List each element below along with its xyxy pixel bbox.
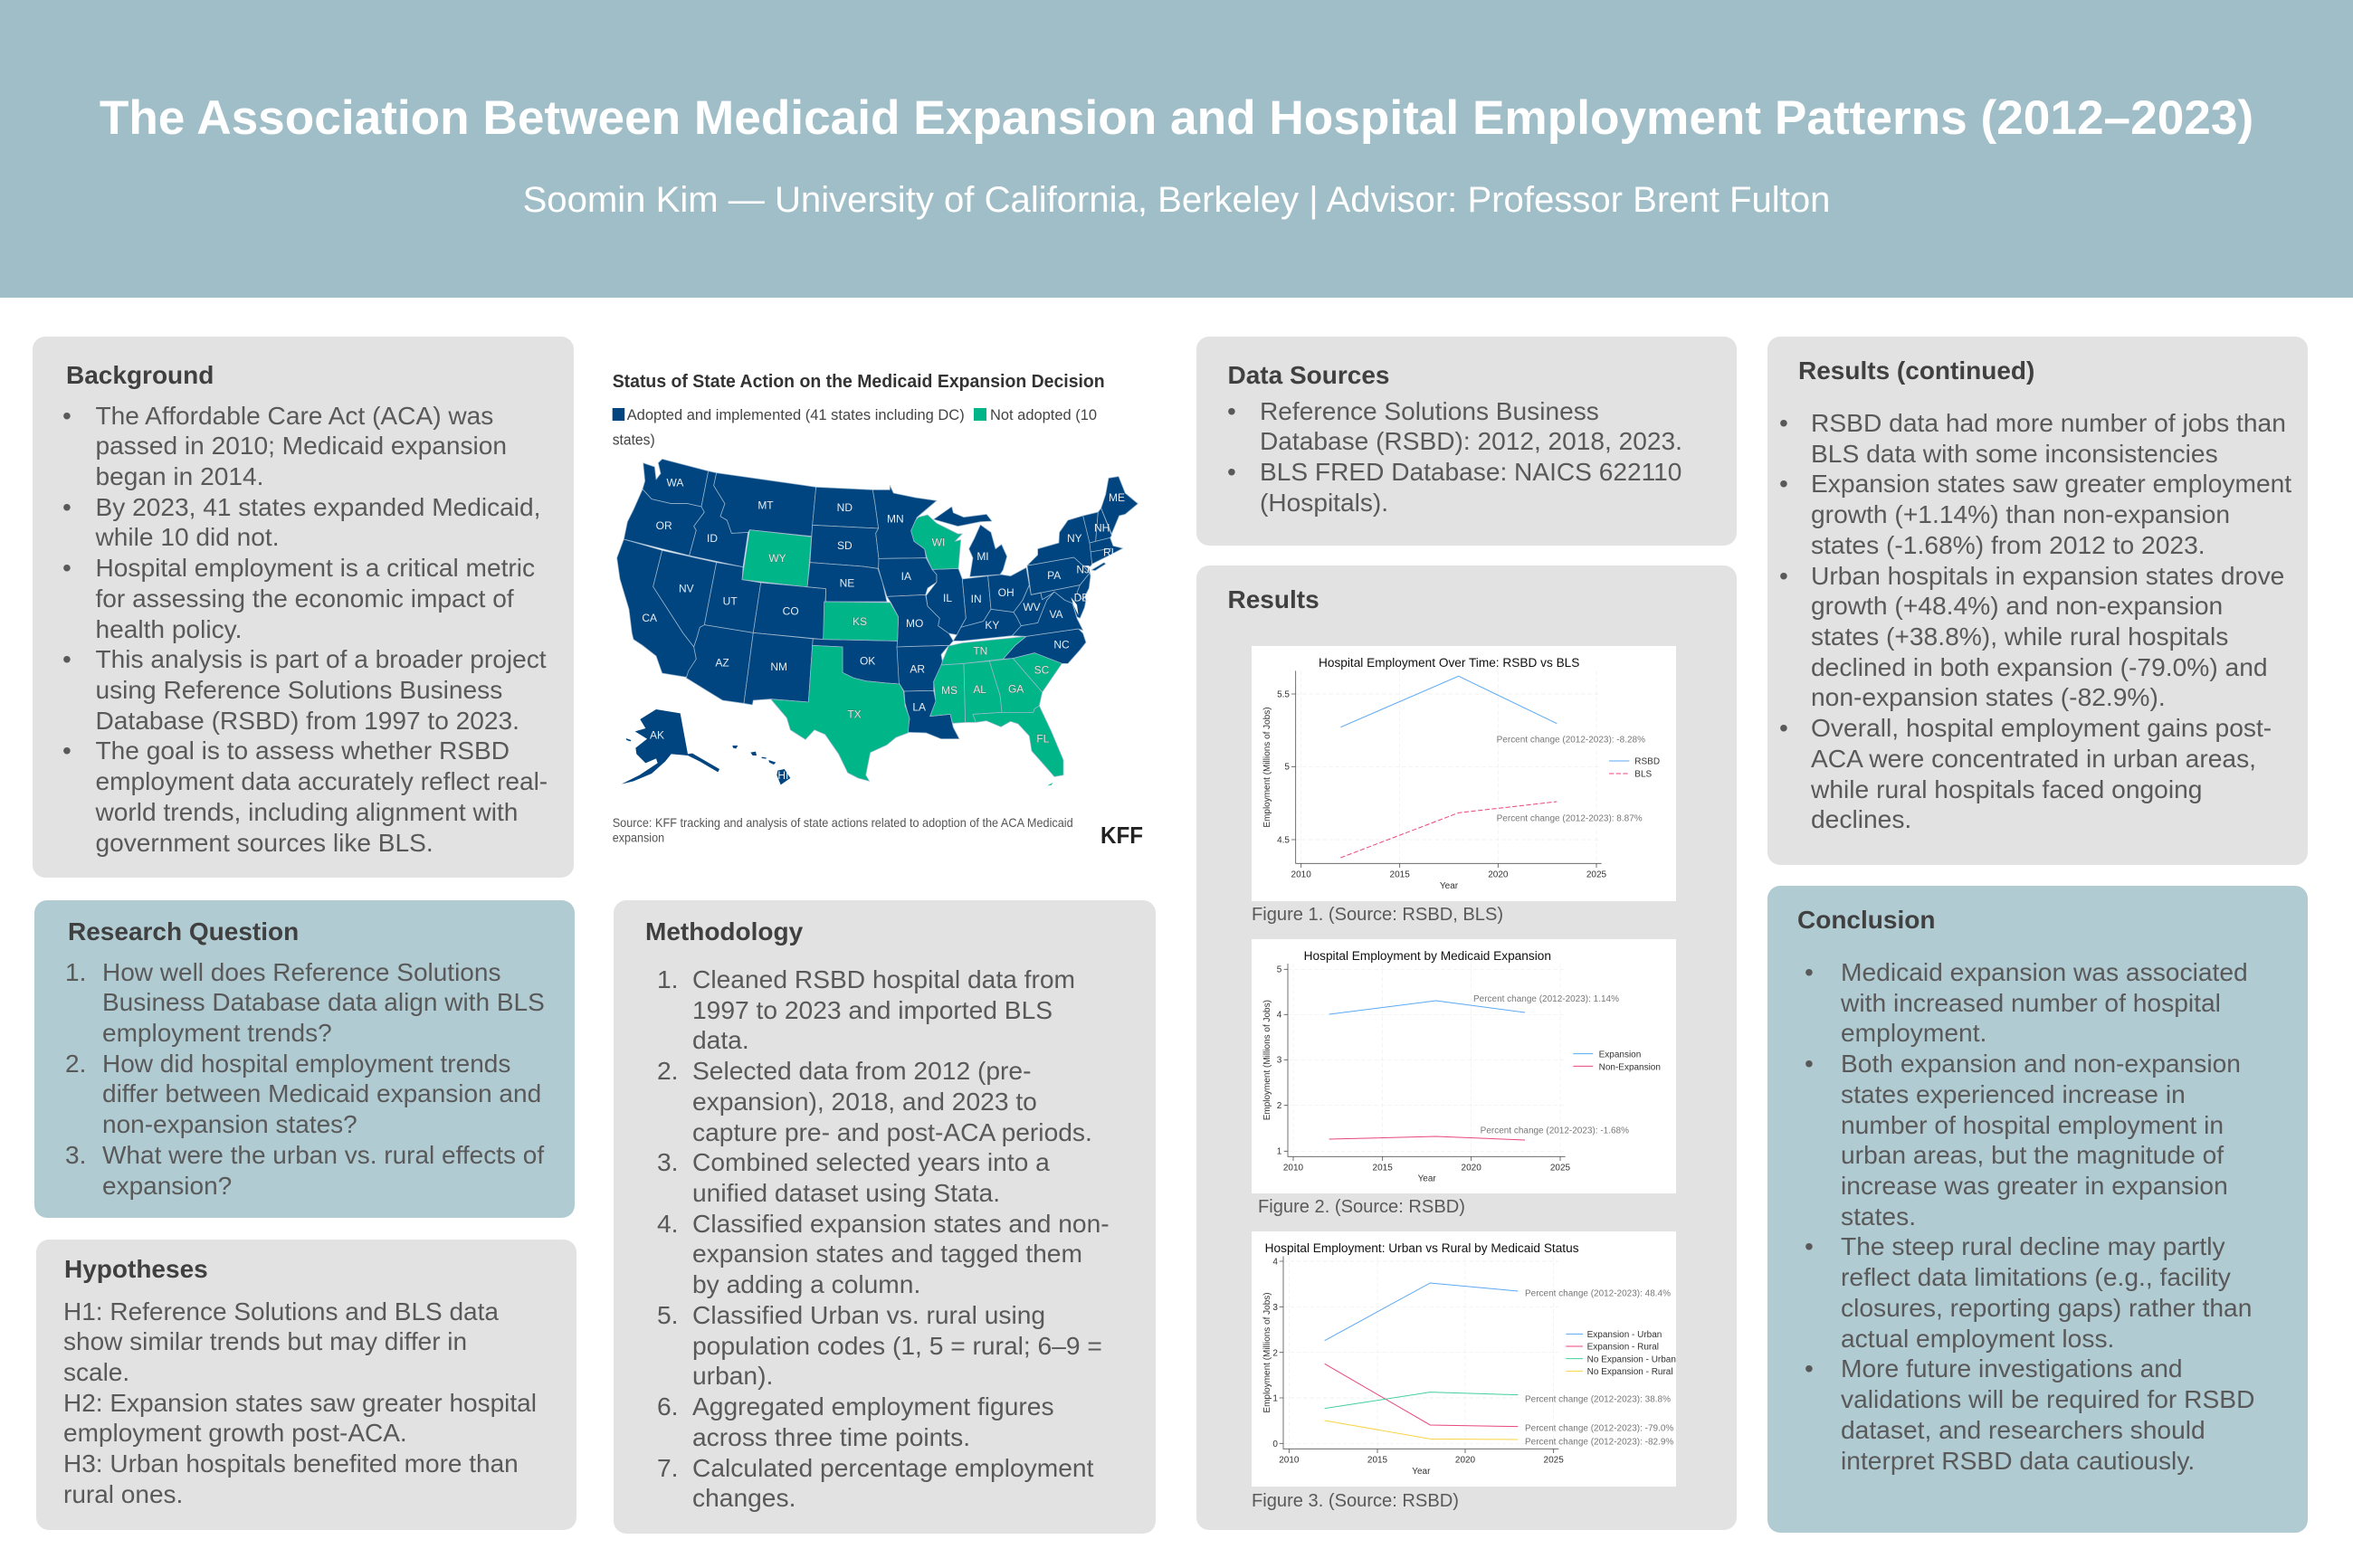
annotations [1473, 994, 1629, 1136]
map source note: expansion [613, 831, 664, 845]
state labels: OK [860, 654, 875, 667]
text: hypotheses list: show similar trends but may differ in [63, 1327, 467, 1355]
text: data sources bullets: Reference Solutions Business [1260, 396, 1599, 425]
text: background bullets: passed in 2010; Medicaid expansion [96, 432, 507, 460]
text: results continued bullets: declined in both expansion (-79.0%) and [1811, 652, 2268, 681]
text: methodology steps: capture pre- and post-ACA periods. [692, 1117, 1092, 1146]
text: background bullets: Database (RSBD) from 1997 to 2023. [96, 707, 519, 735]
state labels: NY [1067, 532, 1082, 545]
text: methodology steps: across three time points. [692, 1422, 970, 1451]
axis labels: 2015 [1390, 870, 1410, 880]
state labels: NC [1053, 638, 1070, 651]
state labels: IA [901, 570, 911, 583]
line: no expansion urban [1325, 1392, 1518, 1409]
line: expansion [1329, 1001, 1525, 1014]
map legend: Adopted and implemented (41 states including DC) [627, 406, 965, 423]
text: methodology steps: Combined selected years into a [692, 1147, 1050, 1176]
axis labels [1262, 690, 1607, 891]
axis labels: Employment (Millions of Jobs) [1262, 1292, 1272, 1413]
text: conclusion bullets: More future investigations and [1841, 1354, 2183, 1383]
state labels: KS [853, 615, 867, 628]
text: hypotheses list: H3: Urban hospitals benefited more than [63, 1449, 519, 1478]
text: conclusion bullets: states. [1841, 1202, 1916, 1231]
legend: Expansion - Urban [1587, 1330, 1662, 1340]
text: data sources bullets: • [1227, 458, 1236, 486]
axis labels: 2015 [1367, 1455, 1388, 1465]
map source note [613, 815, 1073, 845]
text: data sources bullets: • [1227, 396, 1236, 425]
title: The Association Between Medicaid Expansion and Hospital Employment Patterns (2012–2023) [100, 90, 2253, 145]
state labels: CO [783, 604, 799, 617]
state labels: MT [757, 499, 774, 512]
annotations: Percent change (2012-2023): -1.68% [1481, 1126, 1629, 1136]
text: methodology steps [657, 965, 1110, 1512]
text: results continued bullets: growth (+48.4%) and non-expansion [1811, 591, 2223, 620]
chart title: Hospital Employment by Medicaid Expansion [1304, 949, 1551, 963]
state labels: KY [985, 619, 999, 632]
heading: background: Background [66, 361, 214, 389]
state labels: SD [837, 539, 853, 552]
annotations [1525, 1288, 1673, 1447]
annotations: Percent change (2012-2023): 38.8% [1525, 1394, 1671, 1404]
axis labels: 0 [1272, 1440, 1278, 1449]
text: results continued bullets: states (-1.68%) from 2012 to 2023. [1811, 530, 2205, 559]
text: results continued bullets: while rural hospitals faced ongoing [1811, 774, 2202, 803]
map legend: Not adopted (10 [990, 406, 1097, 423]
text: data sources bullets [1227, 396, 1682, 517]
state labels: ME [1109, 491, 1125, 504]
text: background bullets: using Reference Solutions Business [96, 676, 502, 704]
text: research questions list [65, 957, 545, 1200]
axes [1284, 964, 1566, 1161]
text: background bullets: • [62, 402, 71, 429]
text: background bullets: employment data accurately reflect real- [96, 767, 548, 795]
text: methodology steps: 2. [657, 1056, 679, 1085]
chart: figure 1 [1252, 646, 1676, 901]
state labels: WY [768, 552, 786, 565]
text: conclusion bullets: increase was greater in expansion [1841, 1171, 2228, 1200]
state labels: IL [943, 592, 952, 604]
caption: figure 1: Figure 1. (Source: RSBD, BLS) [1252, 905, 1503, 925]
text: conclusion bullets: closures, reporting gaps) rather than [1841, 1293, 2252, 1322]
panel: methodology [614, 900, 1156, 1534]
text: conclusion bullets: interpret RSBD data cautiously. [1841, 1446, 2195, 1475]
annotations [1497, 736, 1645, 824]
map: US states [617, 459, 1138, 785]
text: conclusion bullets: validations will be required for RSBD [1841, 1384, 2254, 1413]
axis labels: 4 [1277, 1011, 1282, 1021]
legend [1566, 1330, 1676, 1377]
state labels: ID [707, 532, 718, 545]
state labels: VA [1049, 608, 1063, 621]
panel: results [1196, 565, 1737, 1530]
text: methodology steps: changes. [692, 1483, 795, 1512]
state labels: AR [910, 662, 925, 675]
text: results continued bullets: RSBD data had more number of jobs than [1811, 408, 2286, 437]
axis labels: Year [1412, 1467, 1431, 1477]
annotations: Percent change (2012-2023): -8.28% [1497, 736, 1645, 746]
heading: research question: Research Question [68, 917, 299, 946]
text: background bullets: • [62, 493, 71, 521]
axes [1280, 1256, 1558, 1453]
state labels: TN [973, 645, 987, 658]
state labels: HI [777, 769, 788, 782]
text: background bullets: • [62, 645, 71, 673]
non-expansion states [742, 515, 1063, 785]
line: no expansion rural [1325, 1421, 1518, 1440]
state labels: AK [650, 728, 664, 741]
map title: Status of State Action on the Medicaid Expansion Decision [613, 372, 1105, 392]
text: background bullets: began in 2014. [96, 462, 263, 490]
state labels: MI [976, 550, 989, 563]
text: research questions list: Business Database data align with BLS [102, 988, 545, 1016]
text: conclusion bullets: dataset, and researchers should [1841, 1415, 2205, 1444]
text: methodology steps: Calculated percentage employment [692, 1453, 1093, 1482]
text: research questions list: expansion? [102, 1172, 232, 1200]
state labels: TX [847, 708, 862, 721]
text: background bullets: world trends, including alignment with [96, 798, 518, 826]
axis labels: 2020 [1455, 1455, 1476, 1465]
text: results continued bullets: declines. [1811, 804, 1911, 833]
figure: medicaid expansion status map [612, 372, 1143, 849]
annotations: Percent change (2012-2023): 8.87% [1497, 814, 1643, 824]
text: conclusion bullets: employment. [1841, 1018, 1986, 1047]
text: research questions list: non-expansion states? [102, 1110, 357, 1138]
text: results continued bullets: states (+38.8%), while rural hospitals [1811, 622, 2228, 651]
axis labels: Year [1440, 881, 1459, 891]
line: expansion urban [1325, 1283, 1518, 1341]
text: results continued bullets: • [1779, 469, 1788, 498]
panel: research question [34, 900, 575, 1218]
text: methodology steps: 3. [657, 1147, 679, 1176]
text: methodology steps: Classified Urban vs. rural using [692, 1300, 1045, 1329]
state labels: MO [906, 617, 923, 630]
text: methodology steps: expansion states and tagged them [692, 1239, 1082, 1268]
text: methodology steps: Selected data from 2012 (pre- [692, 1056, 1031, 1085]
legend: RSBD [1634, 757, 1660, 767]
text: methodology steps: data. [692, 1025, 749, 1054]
text: hypotheses list [63, 1297, 537, 1508]
text: conclusion bullets: reflect data limitations (e.g., facility [1841, 1262, 2231, 1291]
text: methodology steps: by adding a column. [692, 1269, 920, 1298]
legend [1573, 1050, 1661, 1072]
chart: figure 3 [1252, 1231, 1676, 1487]
axis labels: 5 [1277, 965, 1282, 975]
text: methodology steps: 1. [657, 965, 679, 993]
caption: figure 3: Figure 3. (Source: RSBD) [1252, 1491, 1459, 1511]
axis labels: Year [1418, 1174, 1436, 1184]
text: research questions list: What were the urban vs. rural effects of [102, 1141, 544, 1169]
state labels: CA [642, 612, 657, 624]
axis labels: 2025 [1550, 1163, 1571, 1173]
text: methodology steps: expansion), 2018, and 2023 to [692, 1087, 1037, 1116]
text: data sources bullets: Database (RSBD): 2012, 2018, 2023. [1260, 427, 1682, 455]
text: results continued bullets [1779, 408, 2291, 833]
legend: Non-Expansion [1599, 1062, 1661, 1072]
state labels: GA [1008, 682, 1024, 695]
text: methodology steps: 5. [657, 1300, 679, 1329]
text: background bullets: • [62, 554, 71, 582]
text: methodology steps: Cleaned RSBD hospital data from [692, 965, 1075, 993]
text: conclusion bullets: number of hospital employment in [1841, 1110, 2224, 1139]
text: results continued bullets: growth (+1.14%) than non-expansion [1811, 499, 2230, 528]
legend: Expansion [1599, 1050, 1641, 1060]
text: results continued bullets: non-expansion states (-82.9%). [1811, 682, 2166, 711]
line: non-expansion [1329, 1136, 1525, 1140]
state labels: NH [1094, 522, 1110, 535]
text: conclusion bullets: • [1805, 1354, 1814, 1383]
text: research questions list: 3. [65, 1141, 86, 1169]
text: research questions list: How did hospital employment trends [102, 1050, 510, 1078]
axis labels: 3 [1277, 1056, 1282, 1066]
text: results continued bullets: Overall, hospital employment gains post- [1811, 713, 2272, 742]
text: hypotheses list: employment growth post-ACA. [63, 1419, 407, 1447]
state labels: AL [973, 683, 986, 696]
axis labels: 3 [1272, 1303, 1278, 1313]
panel: data sources [1196, 337, 1737, 546]
text: hypotheses list: rural ones. [63, 1480, 183, 1508]
state labels: WI [932, 537, 945, 549]
state labels: NM [770, 660, 787, 673]
caption: figure 2: Figure 2. (Source: RSBD) [1258, 1197, 1465, 1217]
state labels: FL [1036, 733, 1050, 746]
text: conclusion bullets: urban areas, but the magnitude of [1841, 1140, 2224, 1169]
axis labels: 4 [1272, 1258, 1278, 1268]
grid lines [1288, 964, 1566, 1156]
text: methodology steps: 6. [657, 1392, 679, 1421]
text: results continued bullets: • [1779, 561, 1788, 590]
text: results continued bullets: Urban hospitals in expansion states drove [1811, 561, 2284, 590]
axis labels [1262, 965, 1571, 1184]
axis labels [1262, 1258, 1564, 1477]
panel: conclusion [1767, 886, 2308, 1533]
text: hypotheses list: H2: Expansion states saw greater hospital [63, 1389, 537, 1417]
state labels: WV [1023, 601, 1041, 613]
heading: methodology: Methodology [645, 917, 803, 946]
text: background bullets: The Affordable Care Act (ACA) was [96, 402, 493, 429]
state labels: SC [1034, 663, 1050, 676]
text: background bullets: The goal is to assess whether RSBD [96, 736, 510, 765]
state labels: WA [667, 477, 683, 489]
text: conclusion bullets: states experienced increase in [1841, 1079, 2186, 1108]
text: conclusion bullets: Medicaid expansion was associated [1841, 957, 2248, 986]
chart title: Hospital Employment Over Time: RSBD vs BLS [1319, 656, 1579, 670]
text: results continued bullets: ACA were concentrated in urban areas, [1811, 744, 2256, 773]
map legend: states) [613, 431, 655, 448]
chesapeake bay [1071, 597, 1079, 615]
axis labels: 2 [1277, 1101, 1282, 1111]
axes [1291, 671, 1602, 868]
axis labels: 2010 [1279, 1455, 1300, 1465]
state labels: NJ [1076, 564, 1090, 576]
text: methodology steps: Aggregated employment figures [692, 1392, 1054, 1421]
text: hypotheses list: H1: Reference Solutions and BLS data [63, 1297, 499, 1325]
text: results continued bullets: • [1779, 713, 1788, 742]
text: hypotheses list: scale. [63, 1358, 129, 1386]
text: background bullets: • [62, 736, 71, 765]
text: results continued bullets: Expansion states saw greater employment [1811, 469, 2291, 498]
text: background bullets [62, 402, 548, 857]
text: research questions list: employment trends? [102, 1019, 332, 1047]
text: conclusion bullets: • [1805, 957, 1814, 986]
text: data sources bullets: (Hospitals). [1260, 489, 1388, 517]
text: methodology steps: urban). [692, 1361, 773, 1390]
text: methodology steps: Classified expansion states and non- [692, 1209, 1110, 1238]
state labels: PA [1047, 569, 1061, 582]
panel: results continued [1767, 337, 2308, 865]
annotations: Percent change (2012-2023): -79.0% [1525, 1423, 1673, 1433]
text: background bullets: for assessing the economic impact of [96, 584, 514, 613]
axis labels: 2020 [1488, 870, 1509, 880]
line: expansion rural [1325, 1364, 1518, 1427]
KFF logo: KFF [1100, 822, 1143, 849]
text: conclusion bullets: actual employment loss. [1841, 1324, 2114, 1353]
text: background bullets: This analysis is part of a broader project [96, 645, 547, 673]
heading: conclusion: Conclusion [1797, 906, 1935, 934]
state labels: AZ [715, 657, 729, 670]
text: background bullets: health policy. [96, 615, 242, 643]
state labels: MN [887, 513, 904, 526]
grid lines [1283, 1256, 1558, 1449]
state labels: NE [840, 576, 854, 589]
axis labels: 2010 [1291, 870, 1311, 880]
text: conclusion bullets: The steep rural decline may partly [1841, 1231, 2225, 1260]
map legend [613, 406, 1097, 448]
text: conclusion bullets: Both expansion and non-expansion [1841, 1049, 2241, 1078]
header banner [0, 0, 2353, 298]
axis labels: 4.5 [1277, 836, 1290, 846]
text: data sources bullets: BLS FRED Database: NAICS 622110 [1260, 458, 1681, 486]
axis labels: 2015 [1373, 1163, 1393, 1173]
text: background bullets: government sources like BLS. [96, 829, 433, 857]
state labels: ND [837, 501, 853, 514]
chart title: Hospital Employment: Urban vs Rural by Medicaid Status [1265, 1241, 1579, 1255]
text: conclusion bullets: with increased number of hospital [1841, 988, 2221, 1017]
text: results continued bullets: BLS data with some inconsistencies [1811, 439, 2218, 468]
state labels: OH [998, 586, 1015, 599]
axis labels: 2025 [1586, 870, 1607, 880]
text: background bullets: while 10 did not. [96, 523, 280, 551]
text: research questions list: How well does Reference Solutions [102, 957, 500, 986]
line: BLS [1340, 802, 1557, 858]
text: research questions list: 2. [65, 1050, 86, 1078]
state labels: DE [1074, 591, 1089, 603]
line: RSBD [1340, 677, 1557, 727]
state labels: OR [656, 519, 672, 532]
text: methodology steps: population codes (1, 5 = rural; 6–9 = [692, 1331, 1102, 1360]
axis labels: 1 [1277, 1147, 1282, 1157]
text: background bullets: By 2023, 41 states expanded Medicaid, [96, 493, 540, 521]
legend: BLS [1634, 770, 1653, 780]
state labels: LA [912, 700, 926, 713]
text: conclusion bullets: • [1805, 1049, 1814, 1078]
text: conclusion bullets: • [1805, 1231, 1814, 1260]
text: methodology steps: 1997 to 2023 and imported BLS [692, 995, 1053, 1024]
text: results continued bullets: • [1779, 408, 1788, 437]
axis labels: Employment (Millions of Jobs) [1262, 1000, 1272, 1120]
annotations: Percent change (2012-2023): 1.14% [1473, 994, 1619, 1004]
heading: data sources: Data Sources [1227, 360, 1389, 389]
text: background bullets: Hospital employment is a critical metric [96, 554, 535, 582]
axis labels: 2025 [1544, 1455, 1564, 1465]
text: research questions list: differ between Medicaid expansion and [102, 1079, 541, 1107]
axis labels: 5 [1284, 763, 1290, 773]
expansion states [617, 459, 1138, 784]
map source note: Source: KFF tracking and analysis of state actions related to adoption of the ACA Medicaid [613, 815, 1073, 830]
chart: figure 2 [1252, 939, 1676, 1193]
axis labels: Employment (Millions of Jobs) [1262, 708, 1272, 828]
annotations: Percent change (2012-2023): 48.4% [1525, 1288, 1671, 1298]
state labels: MS [941, 684, 957, 697]
panel: background [33, 337, 574, 878]
subtitle: Soomin Kim — University of California, Berkeley | Advisor: Professor Brent Fulton [523, 180, 1830, 220]
text: research questions list: 1. [65, 957, 86, 986]
axis labels: 2 [1272, 1348, 1278, 1358]
legend: No Expansion - Rural [1587, 1367, 1673, 1377]
axis labels: 2020 [1462, 1163, 1481, 1173]
text: methodology steps: unified dataset using Stata. [692, 1178, 1000, 1207]
state labels [642, 477, 1125, 782]
state labels: UT [723, 595, 738, 608]
axis labels: 1 [1272, 1394, 1278, 1404]
text: conclusion bullets [1805, 957, 2254, 1475]
legend [1609, 757, 1660, 780]
state labels: IN [971, 593, 982, 605]
text: methodology steps: 7. [657, 1453, 679, 1482]
heading: results continued: Results (continued) [1798, 356, 2034, 385]
legend: Expansion - Rural [1587, 1343, 1659, 1353]
axis labels: 5.5 [1277, 690, 1290, 700]
heading: results: Results [1227, 585, 1319, 613]
state labels: NV [679, 582, 694, 594]
state labels: RI [1103, 546, 1114, 558]
heading: hypotheses: Hypotheses [64, 1255, 208, 1283]
legend: No Expansion - Urban [1587, 1354, 1676, 1364]
panel: hypotheses [36, 1240, 576, 1530]
axis labels: 2010 [1283, 1163, 1304, 1173]
annotations: Percent change (2012-2023): -82.9% [1525, 1437, 1673, 1447]
grid lines [1296, 671, 1602, 864]
text: methodology steps: 4. [657, 1209, 679, 1238]
